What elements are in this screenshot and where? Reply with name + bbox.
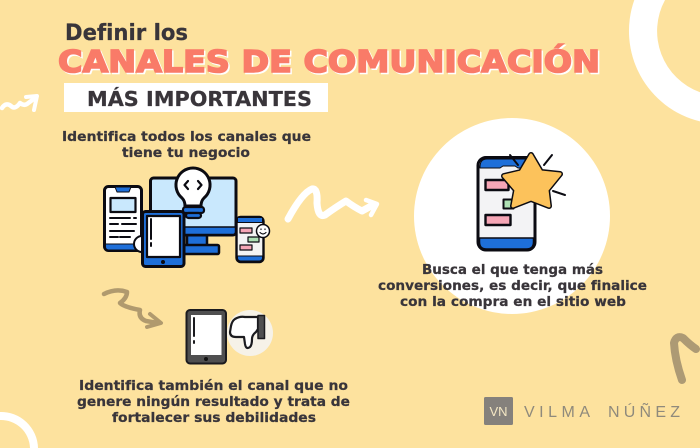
white circle backdrop <box>414 118 610 314</box>
title: Definir los: Definir los <box>65 21 188 46</box>
logo: Vilma Núñez <box>484 397 680 425</box>
arrow: brown squiggle <box>104 290 161 327</box>
icon: devices group <box>104 168 270 266</box>
icon: left phone <box>104 186 150 252</box>
logo: Vilma Núñez: VILMA <box>524 404 590 421</box>
decorative ring bottom left <box>0 412 38 448</box>
subtitle banner: más importantes <box>64 83 328 112</box>
text block: identifica también: fortalecer sus debilidades <box>112 410 316 426</box>
icon: monitor <box>150 178 236 254</box>
logo: Vilma Núñez: NÚÑEZ <box>608 401 680 421</box>
icon: blue tablet <box>142 212 184 266</box>
star <box>504 155 560 206</box>
arrow: white center <box>288 189 377 219</box>
grey tablet <box>186 310 226 364</box>
text block: busca el que tenga más: Busca el que tenga más <box>422 262 603 278</box>
star rays <box>510 155 565 195</box>
text block: busca el que tenga más <box>378 262 647 310</box>
text block: busca el que tenga más: con la compra en el sitio web <box>400 294 626 310</box>
thumbs down <box>230 316 264 348</box>
phone <box>478 158 535 250</box>
icon: light bulb <box>176 168 210 218</box>
text block: identifica también <box>77 378 350 426</box>
text block: identifica todos los canales: Identifica todos los canales que <box>62 129 311 145</box>
text block: identifica también: genere ningún resultado y trata de <box>77 394 350 410</box>
text block: identifica todos los canales: tiene tu negocio <box>122 145 250 161</box>
icon: grey tablet with thumbs down <box>186 310 273 364</box>
blob behind thumb <box>227 310 273 356</box>
icon: phone with star <box>478 155 565 250</box>
text block: busca el que tenga más: conversiones, es decir, que finalice <box>378 278 647 294</box>
logo: Vilma Núñez: VN <box>489 404 508 419</box>
arrow: brown stroke bottom right <box>674 337 696 380</box>
text block: identifica todos los canales <box>62 129 311 161</box>
decorative ring top right <box>629 0 700 121</box>
title: canales de comunicación: CANALES DE COMUNICACIÓN <box>58 43 600 80</box>
subtitle banner: más importantes: MÁS IMPORTANTES <box>87 87 312 111</box>
title: canales de comunicación: CANALES DE COMUNICACIÓN <box>60 44 602 82</box>
arrow: small white left <box>2 96 37 110</box>
text block: identifica también: Identifica también el canal que no <box>79 378 348 394</box>
icon: chat phone <box>236 217 270 262</box>
